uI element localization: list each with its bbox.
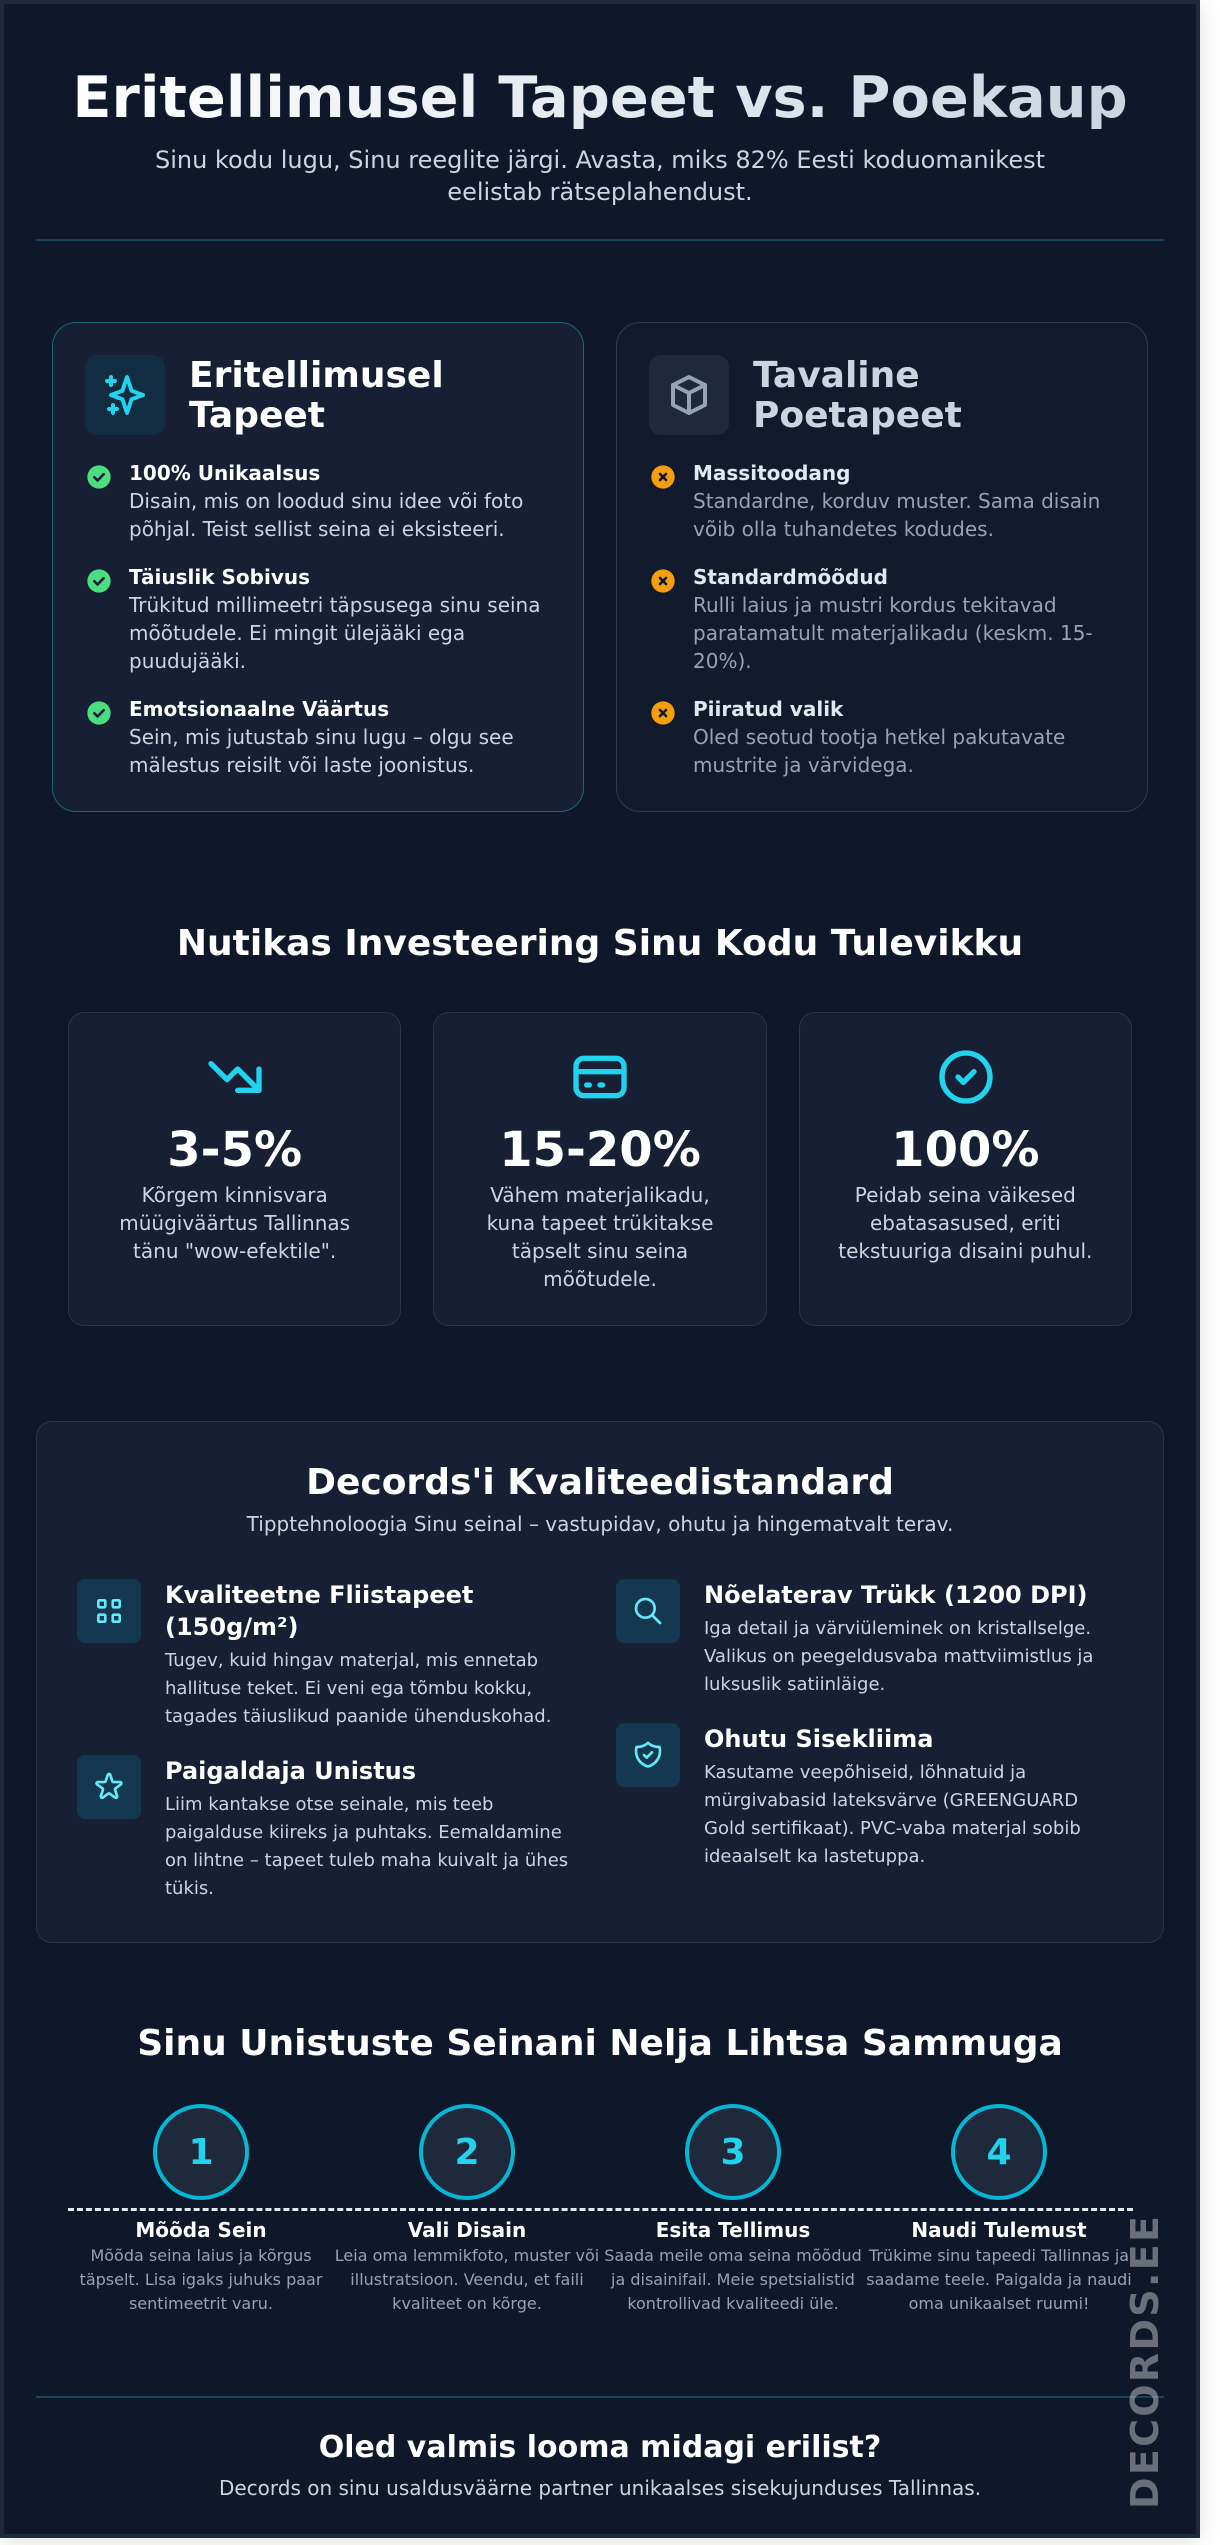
step 4 text: [866, 2246, 1132, 2313]
step 2 text: [335, 2246, 599, 2313]
stat description: Vähem materjalikadu,: [490, 1183, 710, 1207]
step 2 number: [419, 2104, 515, 2200]
icon: shield check: [616, 1723, 680, 1787]
stat description: täpselt sinu seina: [512, 1239, 688, 1263]
footer heading: Oled valmis looma midagi erilist?: [319, 2430, 881, 2465]
feature text: [165, 1794, 568, 1899]
step 4 text: saadame teele. Paigalda ja naudi: [866, 2270, 1132, 2289]
benefit: perfect fit: puudujääki.: [129, 649, 246, 673]
step 2 text: Leia oma lemmikfoto, muster või: [335, 2246, 599, 2265]
stat description: tekstuuriga disaini puhul.: [838, 1239, 1092, 1263]
stat value: 15-20%: [499, 1122, 701, 1178]
step 3 title: Esita Tellimus: [656, 2218, 810, 2242]
drawback: standard sizes: [651, 565, 1093, 673]
step 4 number: 4: [986, 2132, 1012, 2172]
drawback: limited choice: mustrite ja värvidega.: [693, 753, 914, 777]
heading: quality standard: Decords'i Kvaliteedistandard: [306, 1462, 894, 1503]
drawback: limited choice: [651, 697, 1065, 777]
step 2 title: Vali Disain: [408, 2218, 526, 2242]
benefit: uniqueness: [87, 461, 523, 541]
panel: store wallpaper: [616, 322, 1148, 812]
icon: sparkles: [85, 355, 165, 435]
drawback: mass production: võib olla tuhandetes kodudes.: [693, 517, 994, 541]
benefit: emotional value: Sein, mis jutustab sinu lugu – olgu see: [129, 725, 514, 749]
stat description: Peidab seina väikesed: [855, 1183, 1076, 1207]
feature text: Tugev, kuid hingav materjal, mis ennetab: [165, 1650, 538, 1671]
benefit: perfect fit: mõõtudele. Ei mingit ülejääki ega: [129, 621, 465, 645]
heading: custom wallpaper: Tapeet: [189, 395, 325, 436]
feature text: luksuslik satiinläige.: [704, 1674, 885, 1695]
feature title: Paigaldaja Unistus: [165, 1757, 416, 1785]
feature title: Nõelaterav Trükk (1200 DPI): [704, 1581, 1088, 1609]
feature title: [165, 1581, 473, 1641]
step 3 text: Saada meile oma seina mõõdud: [604, 2246, 862, 2265]
stat description: tänu "wow-efektile".: [133, 1239, 336, 1263]
step 3 text: ja disainifail. Meie spetsialistid: [611, 2270, 855, 2289]
heading: custom wallpaper: [189, 355, 444, 436]
stat description: kuna tapeet trükitakse: [487, 1211, 713, 1235]
panel: custom wallpaper: [52, 322, 584, 812]
feature text: [704, 1618, 1093, 1695]
feature: sharp print: [616, 1579, 1093, 1695]
step 1 text: Mõõda seina laius ja kõrgus: [90, 2246, 312, 2265]
step 1 number: [153, 2104, 249, 2200]
feature text: Iga detail ja värviüleminek on kristallselge.: [704, 1618, 1091, 1639]
subtitle: eelistab rätseplahendust.: [447, 178, 753, 206]
benefit: emotional value: Emotsionaalne Väärtus: [129, 697, 389, 721]
stat description: müügiväärtus Tallinnas: [119, 1211, 350, 1235]
benefit: uniqueness: 100% Unikaalsus: [129, 461, 320, 485]
benefit: perfect fit: Trükitud millimeetri täpsusega sinu seina: [129, 593, 540, 617]
stat description: Kõrgem kinnisvara: [142, 1183, 328, 1207]
footer text: Decords on sinu usaldusväärne partner unikaalses sisekujunduses Tallinnas.: [219, 2476, 981, 2500]
feature text: mürgivabasid lateksvärve (GREENGUARD: [704, 1790, 1078, 1811]
step 1 text: täpselt. Lisa igaks juhuks paar: [80, 2270, 322, 2289]
feature text: [164, 1650, 551, 1727]
step 3 number: 3: [720, 2132, 746, 2172]
step 1 text: sentimeetrit varu.: [129, 2294, 273, 2313]
drawback: limited choice: Piiratud valik: [693, 697, 843, 721]
heading: store wallpaper: Tavaline: [753, 355, 920, 396]
feature text: Liim kantakse otse seinale, mis teeb: [165, 1794, 493, 1815]
benefit: emotional value: [87, 697, 514, 777]
feature text: on lihtne – tapeet tuleb maha kuivalt ja ühes: [165, 1850, 568, 1871]
feature text: tagades täiuslikud paanide ühenduskohad.: [165, 1706, 551, 1727]
icon: check circle: [939, 1050, 993, 1104]
stat value: 3-5%: [167, 1122, 302, 1178]
subtitle: [155, 146, 1045, 206]
icon: grid squares: [77, 1579, 141, 1643]
step 4 text: Trükime sinu tapeedi Tallinnas ja: [869, 2246, 1129, 2265]
drawback: mass production: Massitoodang: [693, 461, 850, 485]
feature text: paigalduse kiireks ja puhtaks. Eemaldamine: [165, 1822, 562, 1843]
feature text: Valikus on peegeldusvaba mattviimistlus ja: [704, 1646, 1093, 1667]
benefit: perfect fit: [87, 565, 540, 673]
feature text: [704, 1762, 1081, 1867]
heading: store wallpaper: [753, 355, 962, 436]
feature text: Kasutame veepõhiseid, lõhnatuid ja: [704, 1762, 1026, 1783]
feature title: Ohutu Sisekliima: [704, 1725, 933, 1753]
drawback: mass production: [651, 461, 1100, 541]
feature: safe indoor climate: [616, 1723, 1081, 1867]
heading: four steps: Sinu Unistuste Seinani Nelja Lihtsa Sammuga: [137, 2023, 1063, 2064]
feature title: Kvaliteetne Fliistapeet: [165, 1581, 473, 1609]
panel: quality standard: [36, 1421, 1164, 1943]
step 1 text: [80, 2246, 322, 2313]
feature text: hallituse teket. Ei veni ega tõmbu kokku,: [165, 1678, 532, 1699]
brand watermark: DECORDS.EE: [1123, 2214, 1167, 2509]
stat description: ebatasasused, eriti: [870, 1211, 1061, 1235]
drawback: standard sizes: paratamatult materjalikadu (keskm. 15-: [693, 621, 1093, 645]
stat description: [838, 1183, 1092, 1263]
icon: magnifier: [616, 1579, 680, 1643]
stat card: material waste: [433, 1012, 767, 1326]
icon: credit card: [573, 1056, 627, 1098]
quality subtitle: Tipptehnoloogia Sinu seinal – vastupidav, ohutu ja hingematvalt terav.: [247, 1512, 953, 1536]
feature title: (150g/m²): [165, 1613, 298, 1641]
icon: star: [77, 1755, 141, 1819]
icon: cube: [649, 355, 729, 435]
drawback: standard sizes: Rulli laius ja mustri kordus tekitavad: [693, 593, 1057, 617]
drawback: standard sizes: Standardmõõdud: [693, 565, 888, 589]
step 2 text: kvaliteet on kõrge.: [392, 2294, 542, 2313]
benefit: uniqueness: põhjal. Teist sellist seina ei eksisteeri.: [129, 517, 505, 541]
step 3 text: kontrollivad kvaliteedi üle.: [627, 2294, 839, 2313]
feature: nonwoven wallpaper: [77, 1579, 551, 1727]
drawback: mass production: Standardne, korduv muster. Sama disain: [693, 489, 1100, 513]
step 3 number: [685, 2104, 781, 2200]
stat value: 100%: [891, 1122, 1039, 1178]
step 1 title: Mõõda Sein: [135, 2218, 267, 2242]
feature text: ideaalselt ka lastetuppa.: [704, 1846, 925, 1867]
step 3 text: [604, 2246, 862, 2313]
feature text: tükis.: [165, 1878, 214, 1899]
step 1 number: 1: [188, 2132, 214, 2172]
benefit: uniqueness: Disain, mis on loodud sinu idee või foto: [129, 489, 523, 513]
feature: installer friendly: [77, 1755, 568, 1899]
benefit: perfect fit: Täiuslik Sobivus: [129, 565, 310, 589]
step 4 number: [951, 2104, 1047, 2200]
step 2 text: illustratsioon. Veendu, et faili: [350, 2270, 584, 2289]
stat description: [487, 1183, 713, 1291]
heading: investment: Nutikas Investeering Sinu Kodu Tulevikku: [177, 923, 1023, 964]
stat card: hides flaws: [799, 1012, 1132, 1326]
step 2 number: 2: [454, 2132, 480, 2172]
heading: store wallpaper: Poetapeet: [753, 395, 962, 436]
feature text: Gold sertifikaat). PVC-vaba materjal sobib: [704, 1818, 1081, 1839]
stat card: property value: [68, 1012, 401, 1326]
step 4 title: Naudi Tulemust: [911, 2218, 1087, 2242]
subtitle: Sinu kodu lugu, Sinu reeglite järgi. Avasta, miks 82% Eesti koduomanikest: [155, 146, 1045, 174]
benefit: emotional value: mälestus reisilt või laste joonistus.: [129, 753, 474, 777]
step 4 text: oma unikaalset ruumi!: [909, 2294, 1089, 2313]
stat description: mõõtudele.: [543, 1267, 657, 1291]
title: Eritellimusel Tapeet vs. Poekaup: [72, 64, 1128, 131]
stat description: [119, 1183, 350, 1263]
drawback: standard sizes: 20%).: [693, 649, 752, 673]
icon: trending arrow: [208, 1061, 262, 1093]
heading: custom wallpaper: Eritellimusel: [189, 355, 444, 396]
drawback: limited choice: Oled seotud tootja hetkel pakutavate: [693, 725, 1065, 749]
